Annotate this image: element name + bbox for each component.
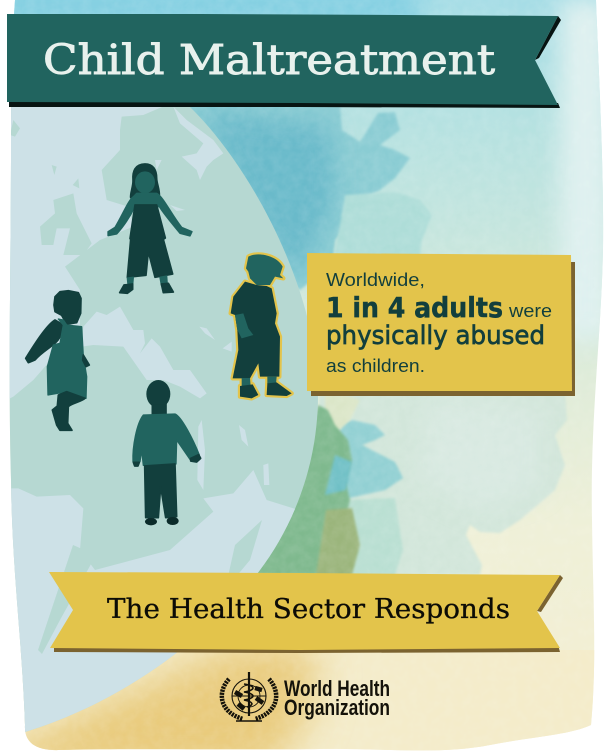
- statistic text: physically abused: [326, 321, 545, 351]
- ribbon body: [49, 572, 560, 650]
- lower pale wash: [300, 393, 567, 575]
- icon: WHO emblem: [222, 672, 276, 721]
- ribbon shadow: [54, 575, 563, 653]
- globe: [10, 107, 318, 732]
- upper blue wash: [180, 100, 410, 290]
- statistic text: 1 in 4 adults: [326, 291, 503, 324]
- child: curly-haired child in dress: [26, 291, 89, 430]
- title text: Child Maltreatment: [43, 36, 496, 84]
- child: boy seen from behind: [133, 380, 201, 525]
- lower teal patches: [345, 498, 403, 575]
- child: girl with outstretched arms: [108, 164, 192, 293]
- green wash beside globe: [250, 405, 355, 575]
- WHO wordmark: World Health: [284, 676, 390, 701]
- WHO wordmark: Organization: [284, 695, 390, 720]
- bottom yellow wash: [25, 650, 594, 750]
- globe land: islands and southern strip: [10, 120, 262, 736]
- cream patch beside globe: [325, 395, 360, 430]
- child: highlighted child with yellow outline: [231, 254, 292, 398]
- subtitle ribbon: [49, 572, 563, 653]
- statistic card: [307, 253, 575, 396]
- WHO logo: [222, 672, 390, 721]
- card body: [307, 253, 572, 391]
- banner ribbon: [7, 14, 558, 105]
- subtitle text: The Health Sector Responds: [107, 594, 510, 625]
- statistic text: as children.: [326, 356, 425, 376]
- statistic text: [326, 270, 552, 376]
- globe oceans: [10, 107, 295, 732]
- WHO wordmark: [284, 676, 390, 720]
- statistic text: were: [508, 301, 552, 321]
- banner shadow: [9, 16, 561, 108]
- statistic text: Worldwide,: [326, 270, 425, 290]
- card shadow: [311, 262, 575, 396]
- title banner: [7, 14, 561, 108]
